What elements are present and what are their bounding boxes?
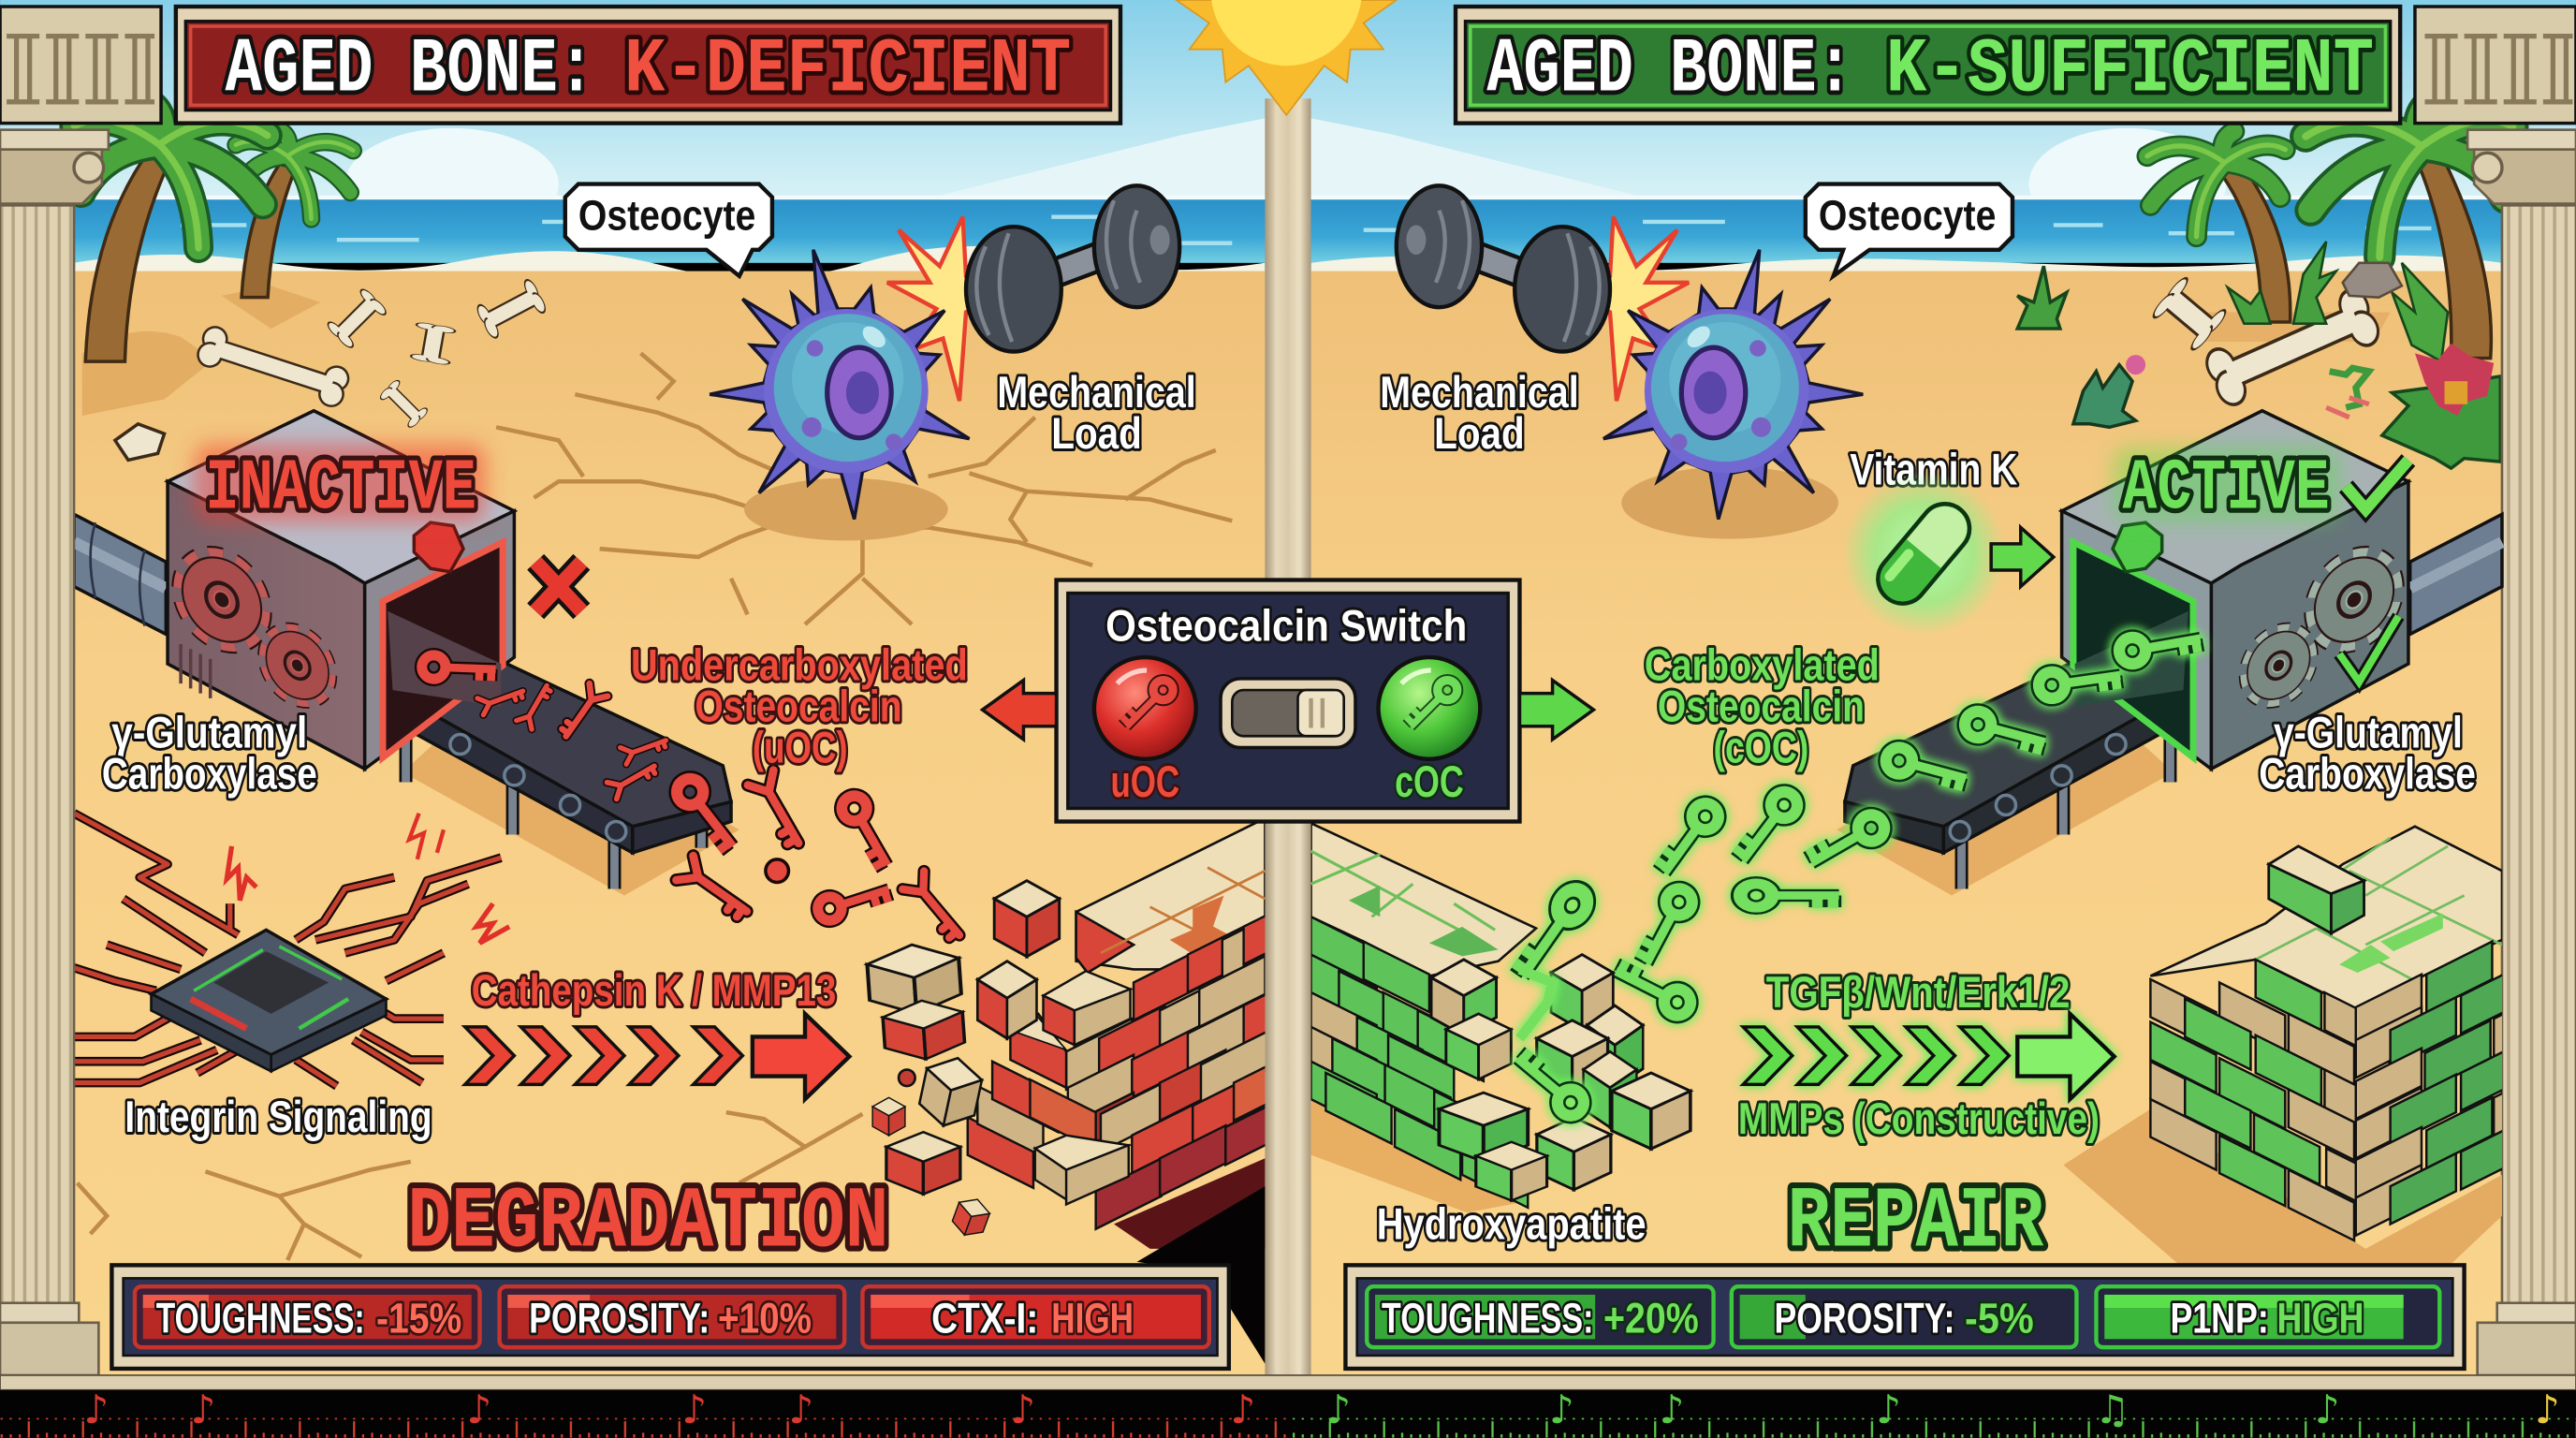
shadow: osteocytes: [744, 466, 1838, 540]
callout: osteocyte right: [1806, 184, 2012, 276]
green brick on top of wall: [2269, 846, 2364, 933]
label: undercarboxylated osteocalcin: Osteocalcin: [695, 682, 902, 731]
frame line above footer: [0, 1375, 2576, 1390]
label: uOC: uOC: [1110, 757, 1179, 807]
palm trees: left: [74, 101, 353, 361]
heading: degradation: DEGRADATION: [407, 1173, 889, 1271]
toggle switch: [1221, 679, 1355, 748]
pill: porosity -5%: -5%: [1965, 1294, 2034, 1342]
title banner right: [1456, 7, 2400, 124]
footer strip: music notes and waveform: ♪: [1660, 1387, 1685, 1432]
arrow chain: degradation: [465, 1014, 849, 1099]
keys on right conveyor: carboxylated: [1883, 625, 2203, 791]
brick wall repaired: right: [2063, 825, 2502, 1264]
status: inactive: INACTIVE: [205, 448, 476, 530]
label: MMPs (constructive): MMPs (Constructive): [1738, 1094, 2100, 1144]
pill: toughness +20%: +20%: [1603, 1294, 1699, 1342]
pipe left: [74, 514, 166, 634]
footer strip: music notes and waveform: ♪: [788, 1387, 813, 1432]
pipe right: [2410, 514, 2502, 634]
label: mechanical load right: [1380, 368, 1579, 459]
pill: toughness +20%: TOUGHNESS:: [1382, 1294, 1593, 1342]
status: active with check: ACTIVE: [2123, 448, 2330, 530]
footer strip: music notes and waveform: ♪: [84, 1387, 109, 1432]
conveyor right with legs: [1837, 657, 2183, 895]
title banner left: [176, 7, 1120, 124]
pill: porosity +10%: +10%: [718, 1294, 812, 1342]
scattered broken keys left: [671, 770, 970, 945]
pill: CTX-I high: CTX-I:: [931, 1294, 1038, 1342]
sun: [1177, 0, 1397, 115]
brick wall crumbling: left: [966, 824, 1266, 1363]
label: undercarboxylated osteocalcin: [631, 641, 968, 772]
label: mechanical load left: Load: [1051, 409, 1142, 459]
footer strip: music notes and waveform: [0, 1387, 2576, 1438]
arrow chain: repair: [1743, 1014, 2115, 1099]
callout: osteocyte left: [565, 184, 772, 276]
pill: toughness +20%: [1367, 1286, 1714, 1347]
footer strip: music notes and waveform: ♪: [1876, 1387, 1901, 1432]
arrow: switch to cOC: [1519, 681, 1593, 740]
label: gamma-glutamyl carboxylase right: Carboxylase: [2259, 749, 2476, 799]
pill: CTX-I high: [862, 1286, 1209, 1347]
bones, rock and plants: right: [2017, 242, 2500, 468]
label: mechanical load right: Load: [1434, 409, 1525, 459]
icon: red X: [535, 562, 581, 611]
icon: green cOC ball: [1379, 657, 1480, 759]
callout: osteocyte right: Osteocyte: [1819, 192, 1996, 240]
title banner left: AGED BONE:: [225, 26, 594, 114]
label: cOC: cOC: [1395, 757, 1464, 807]
status bar right: [1345, 1265, 2465, 1369]
arrow: vitamin K to machine: [1991, 527, 2054, 587]
heading: repair: REPAIR: [1788, 1173, 2043, 1271]
footer strip: music notes and waveform: ♪: [1325, 1387, 1351, 1432]
osteocyte cell right: [1603, 250, 1863, 520]
left-going face bricks: [968, 971, 1131, 1204]
footer strip: music notes and waveform: ♪: [2535, 1387, 2560, 1432]
label: gamma-glutamyl carboxylase left: [102, 709, 317, 799]
label: hydroxyapatite: Hydroxyapatite: [1377, 1199, 1647, 1249]
label: vitamin K: Vitamin K: [1850, 446, 2017, 495]
repaired rubble and embedded keys: [1431, 884, 1690, 1200]
label: cathepsin K / MMP13: Cathepsin K / MMP13: [472, 966, 836, 1016]
footer strip: music notes and waveform: ♫: [2095, 1387, 2130, 1432]
label: mechanical load left: [997, 368, 1196, 459]
keys on left conveyor: undercarboxylated: [421, 654, 669, 799]
brick wall under repair: left of right panel: [1311, 823, 1536, 1212]
icon: vitamin K pill with glow: [1841, 472, 2006, 636]
pill: porosity -5%: [1732, 1286, 2076, 1347]
footer strip: music notes and waveform: ♪: [1010, 1387, 1035, 1432]
conveyor left with legs: [393, 657, 739, 895]
footer strip: music notes and waveform: ♪: [1549, 1387, 1574, 1432]
scattered active keys right: [1610, 786, 1889, 1020]
pill: P1NP high: [2096, 1286, 2439, 1347]
label: carboxylated osteocalcin: Carboxylated: [1645, 641, 1880, 691]
label: carboxylated osteocalcin: [1645, 641, 1880, 772]
pill: P1NP high: P1NP:: [2170, 1294, 2269, 1342]
label: undercarboxylated osteocalcin: (uOC): [753, 723, 848, 772]
chip: integrin signaling traces and processor: [74, 814, 509, 1086]
bones on sand: left: [115, 278, 548, 460]
pillar right: [2415, 7, 2576, 1375]
pill: CTX-I high: HIGH: [1051, 1294, 1134, 1342]
label: mechanical load left: Mechanical: [997, 368, 1196, 418]
label: mechanical load right: Mechanical: [1380, 368, 1579, 418]
rubble: loose bricks: [866, 881, 1060, 1240]
heading: osteocalcin switch: Osteocalcin Switch: [1105, 601, 1467, 651]
callout: osteocyte left: Osteocyte: [578, 192, 755, 240]
footer strip: music notes and waveform: ♪: [2315, 1387, 2340, 1432]
title banner left: K-DEFICIENT: [624, 26, 1071, 114]
palm trees: right: [2147, 99, 2512, 359]
pill: toughness -15%: -15%: [376, 1294, 461, 1342]
icon: dumbbell and impact right: [1397, 185, 1689, 401]
status bar left: [111, 1265, 1229, 1369]
footer strip: music notes and waveform: ♪: [466, 1387, 491, 1432]
pill: P1NP high: HIGH: [2277, 1294, 2364, 1342]
icon: dumbbell and impact left: [887, 185, 1179, 401]
pillar left: [0, 7, 161, 1375]
label: TGF-beta / Wnt / Erk: TGFβ/Wnt/Erk1/2: [1766, 968, 2070, 1018]
label: gamma-glutamyl carboxylase left: γ-Glutamyl: [111, 709, 307, 758]
label: gamma-glutamyl carboxylase right: γ-Glutamyl: [2274, 709, 2463, 758]
title banner right: K-SUFFICIENT: [1886, 26, 2374, 114]
pill: porosity +10%: [500, 1286, 844, 1347]
label: carboxylated osteocalcin: Osteocalcin: [1658, 682, 1865, 731]
pill: toughness -15%: TOUGHNESS:: [156, 1294, 365, 1342]
machine: gamma-glutamyl carboxylase left (inactive): [168, 411, 514, 769]
pill: porosity +10%: POROSITY:: [529, 1294, 710, 1342]
arrow: switch to uOC: [983, 681, 1057, 740]
pill: toughness -15%: [135, 1286, 480, 1347]
pill: porosity -5%: POROSITY:: [1774, 1294, 1955, 1342]
machine: gamma-glutamyl carboxylase right (active): [2062, 411, 2408, 769]
cracks: left panel ground: [78, 353, 1232, 1260]
label: carboxylated osteocalcin: (cOC): [1714, 723, 1808, 772]
footer strip: music notes and waveform: ♪: [1231, 1387, 1255, 1432]
osteocyte cell left: [710, 250, 970, 520]
panel: osteocalcin switch: [1057, 580, 1519, 822]
label: integrin signaling: Integrin Signaling: [124, 1093, 432, 1142]
footer strip: music notes and waveform: ♪: [191, 1387, 216, 1432]
label: undercarboxylated osteocalcin: Undercarboxylated: [631, 641, 968, 691]
footer strip: music notes and waveform: ♪: [681, 1387, 707, 1432]
label: gamma-glutamyl carboxylase left: Carboxylase: [102, 749, 317, 799]
center divider pillar: [1265, 98, 1311, 1390]
icon: red uOC ball: [1094, 657, 1196, 759]
label: gamma-glutamyl carboxylase right: [2259, 709, 2476, 799]
title banner right: AGED BONE:: [1486, 26, 1853, 114]
